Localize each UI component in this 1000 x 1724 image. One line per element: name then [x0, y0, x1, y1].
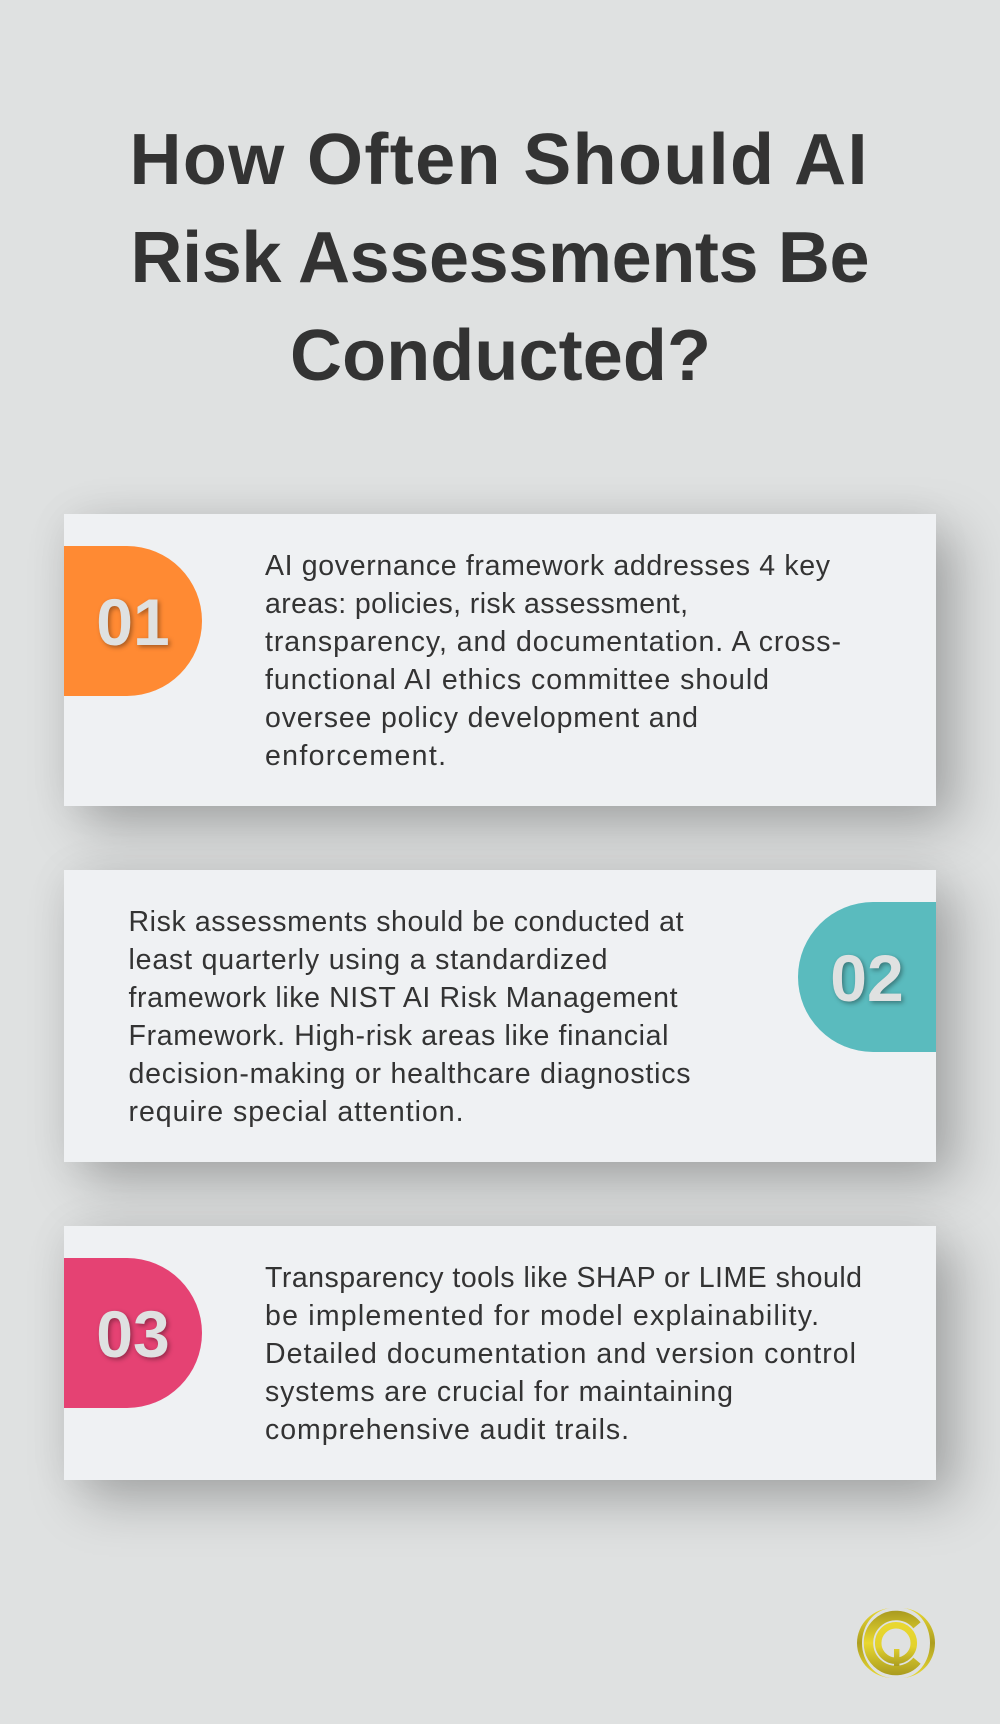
badge: 01 [64, 546, 202, 696]
badge: 02 [798, 902, 936, 1052]
text: step 03 body: be implemented for model explainability. [265, 1300, 819, 1332]
text: step 02 body: require special attention. [128, 1096, 464, 1128]
text: step 01 body: enforcement. [265, 740, 446, 772]
text: step 01 body [265, 550, 841, 772]
text: step 01 body: oversee policy development and [265, 702, 698, 734]
text: step 01 body: AI governance framework addresses 4 key [265, 550, 831, 582]
badge: 02: 02 [830, 941, 904, 1015]
title: Conducted? [290, 316, 711, 396]
text: step 02 body: Framework. High-risk areas like financial [128, 1020, 668, 1052]
badge: 03 [64, 1258, 202, 1408]
text: step 03 body [265, 1262, 862, 1446]
panel: step 02 [64, 870, 936, 1162]
title: How Often Should AI [130, 120, 868, 200]
text: step 01 body: transparency, and documentation. A cross- [265, 626, 841, 658]
text: step 02 body: least quarterly using a standardized [128, 944, 608, 976]
text: step 02 body: Risk assessments should be conducted at [128, 906, 684, 938]
title [130, 120, 870, 396]
icon: gold logo [857, 1608, 935, 1678]
panel: step 01 [64, 514, 936, 806]
text: step 01 body: functional AI ethics committee should [265, 664, 769, 696]
badge: 01: 01 [96, 585, 170, 659]
text: step 03 body: Transparency tools like SHAP or LIME should [265, 1262, 862, 1294]
text: step 03 body: systems are crucial for maintaining [265, 1376, 733, 1408]
text: step 03 body: Detailed documentation and version control [265, 1338, 856, 1370]
text: step 02 body: decision-making or healthcare diagnostics [128, 1058, 690, 1090]
text: step 02 body [128, 906, 690, 1128]
title: Risk Assessments Be [130, 218, 870, 298]
badge: 03: 03 [96, 1297, 170, 1371]
text: step 03 body: comprehensive audit trails. [265, 1414, 629, 1446]
text: step 01 body: areas: policies, risk assessment, [265, 588, 688, 620]
panel: step 03 [64, 1226, 936, 1480]
text: step 02 body: framework like NIST AI Risk Management [128, 982, 678, 1014]
